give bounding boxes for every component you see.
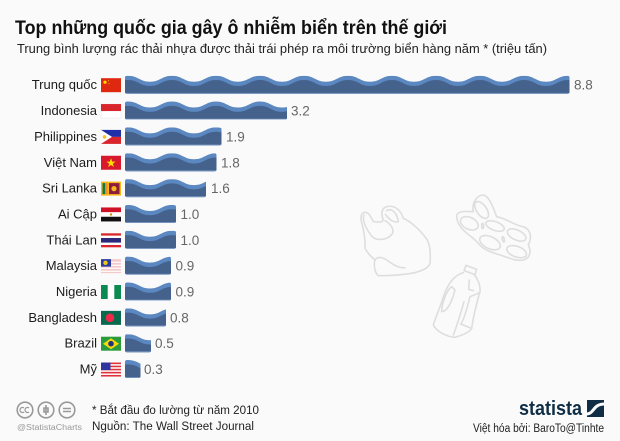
value: 1.8 bbox=[221, 155, 240, 170]
bar bbox=[125, 127, 222, 146]
subtitle: Trung bình lượng rác thải nhựa được thải trái phép ra môi trường biển hàng năm * (triệu tấn) bbox=[17, 41, 547, 56]
value: 1.6 bbox=[211, 181, 230, 196]
logo: statista: statista bbox=[519, 398, 583, 420]
row: Trung quốc 8.8 bbox=[32, 76, 592, 94]
value: 0.9 bbox=[176, 259, 194, 274]
row: Philippines 1.9 bbox=[35, 127, 244, 146]
row: Việt Nam 1.8 bbox=[44, 153, 240, 172]
value: 0.3 bbox=[144, 362, 163, 377]
flag: USA bbox=[101, 363, 121, 377]
flag: Brazil bbox=[101, 337, 121, 351]
bar bbox=[125, 256, 171, 275]
flag: Vietnam bbox=[101, 156, 121, 170]
source: Nguồn: The Wall Street Journal bbox=[92, 419, 254, 433]
bar bbox=[125, 334, 151, 352]
flag: Indonesia bbox=[101, 104, 121, 118]
icon: six-pack rings bbox=[457, 195, 530, 260]
label: Trung quốc bbox=[32, 77, 97, 92]
bar bbox=[125, 153, 216, 172]
label: Thái Lan bbox=[46, 232, 97, 247]
bar bbox=[125, 205, 176, 223]
row: Brazil 0.5 bbox=[66, 334, 174, 352]
flag: Malaysia bbox=[101, 259, 121, 273]
row: Thái Lan 1.0 bbox=[46, 230, 199, 249]
value: 1.9 bbox=[226, 129, 245, 144]
value: 3.2 bbox=[291, 104, 310, 119]
row: Indonesia 3.2 bbox=[42, 102, 310, 120]
bar bbox=[125, 179, 206, 198]
bar bbox=[125, 308, 166, 326]
credit handle: @StatistaCharts bbox=[17, 423, 82, 432]
title: Top những quốc gia gây ô nhiễm biển trên thế giới bbox=[15, 15, 447, 39]
row: Malaysia 0.9 bbox=[46, 256, 194, 275]
row: Sri Lanka 1.6 bbox=[42, 179, 230, 198]
flag: Thailand bbox=[101, 233, 121, 247]
label: Việt Nam bbox=[44, 155, 97, 170]
value: 1.0 bbox=[180, 233, 199, 248]
icon: plastic bag bbox=[361, 206, 430, 276]
flag: Nigeria bbox=[101, 285, 121, 299]
row: Ai Cập 1.0 bbox=[58, 205, 199, 223]
label: Nigeria bbox=[56, 284, 98, 299]
bar bbox=[125, 76, 570, 94]
label: Malaysia bbox=[46, 258, 98, 273]
value: 1.0 bbox=[180, 207, 199, 222]
value: 0.9 bbox=[176, 284, 194, 300]
label: Indonesia bbox=[41, 103, 98, 118]
bar bbox=[125, 360, 140, 378]
label: Sri Lanka bbox=[42, 181, 98, 196]
label: Brazil bbox=[64, 336, 97, 351]
icon: creative commons licences bbox=[17, 402, 75, 418]
label: Ai Cập bbox=[58, 206, 97, 221]
row: Bangladesh 0.8 bbox=[29, 308, 188, 326]
value: 0.5 bbox=[155, 336, 174, 351]
label: Philippines bbox=[34, 129, 97, 144]
flag: Philippines bbox=[101, 130, 121, 144]
label: Mỹ bbox=[80, 362, 97, 377]
flag: Egypt bbox=[101, 207, 121, 221]
bar bbox=[125, 230, 176, 249]
flag: Sri Lanka bbox=[101, 182, 121, 196]
label: Bangladesh bbox=[28, 310, 97, 325]
value: 8.8 bbox=[574, 78, 593, 93]
icon: plastic bottle bbox=[433, 265, 480, 337]
bar bbox=[125, 102, 287, 120]
flag: China bbox=[101, 78, 121, 92]
value: 0.8 bbox=[170, 310, 189, 325]
flag: Bangladesh bbox=[101, 311, 121, 325]
row: Nigeria 0.9 bbox=[56, 282, 194, 300]
footnote: * Bắt đầu đo lường từ năm 2010 bbox=[92, 402, 259, 417]
bar bbox=[125, 282, 171, 300]
row: Mỹ 0.3 bbox=[80, 360, 162, 378]
translation credit: Việt hóa bởi: BaroTo@Tinhte bbox=[473, 423, 604, 435]
